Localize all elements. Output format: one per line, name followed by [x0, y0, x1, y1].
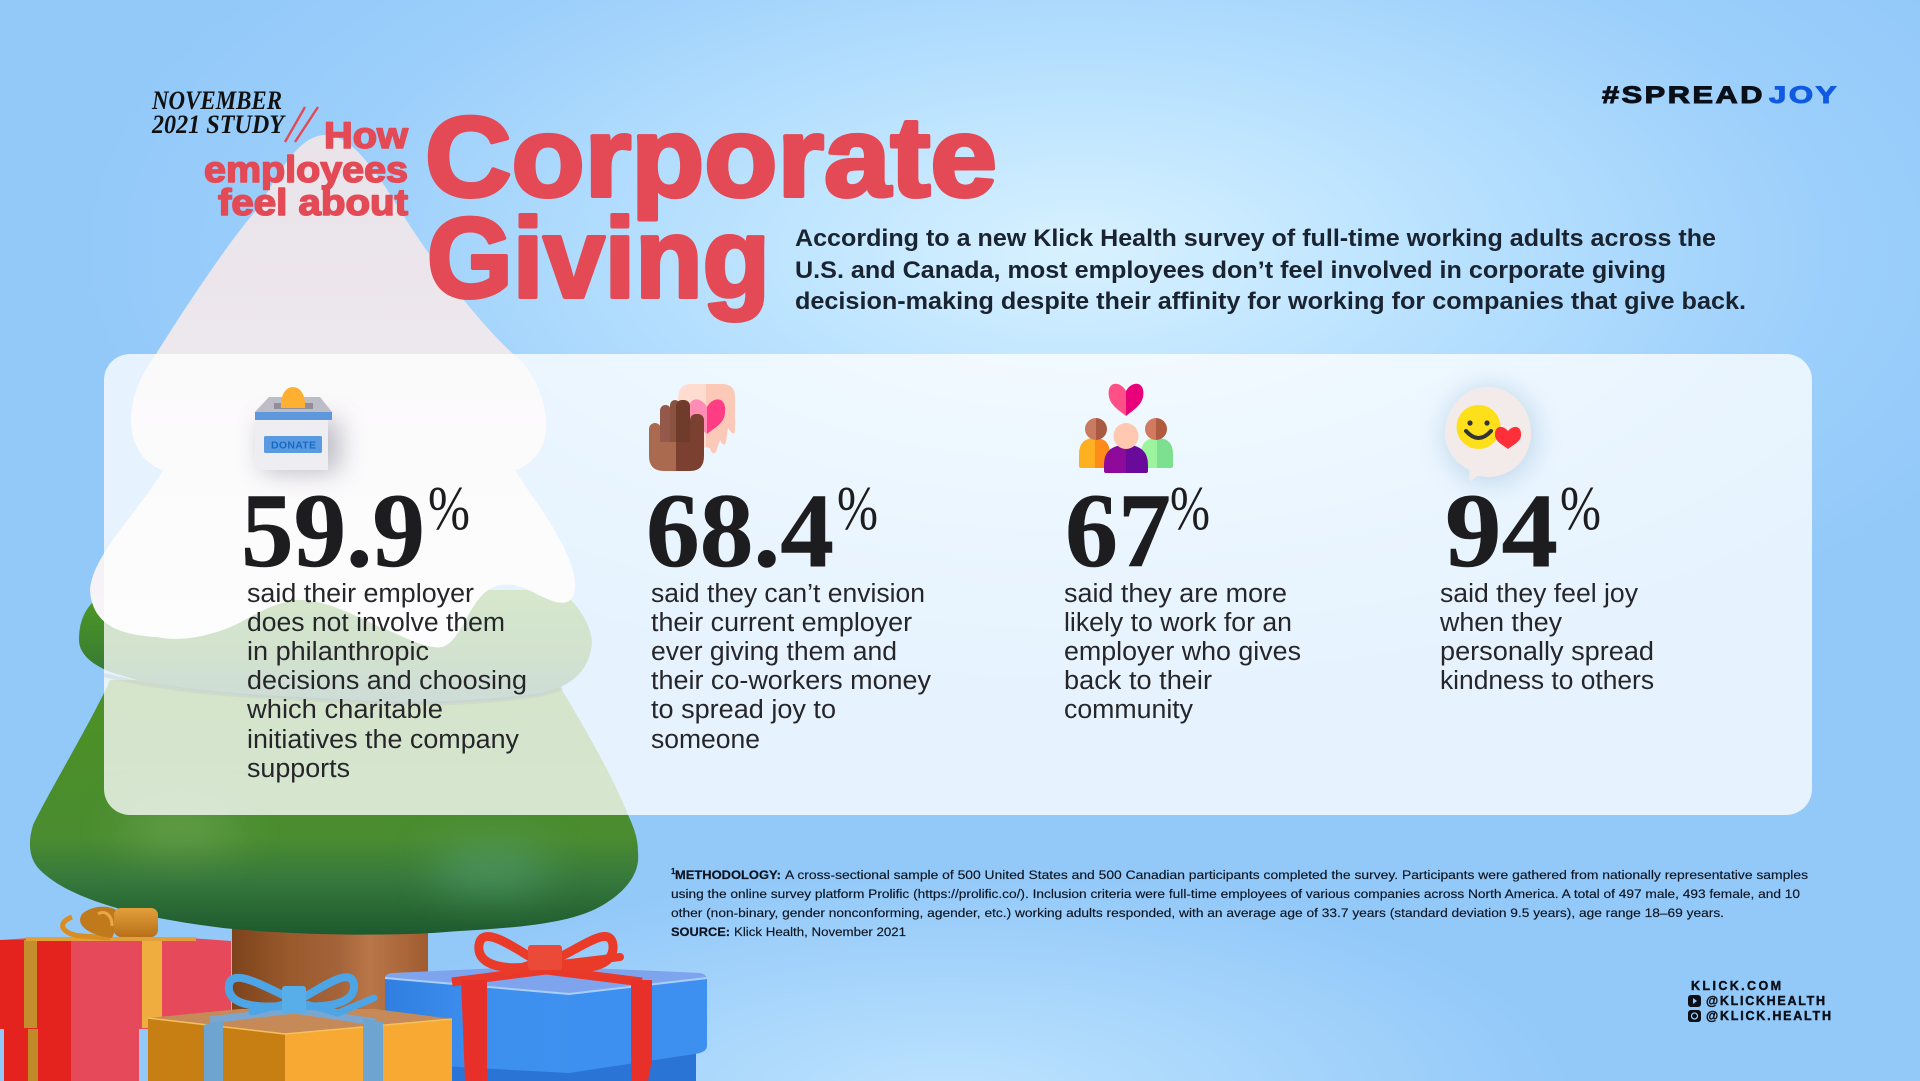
description: in philanthropic	[247, 638, 429, 666]
red gift	[0, 907, 231, 1081]
slashes	[285, 107, 318, 142]
description: which charitable	[246, 696, 443, 724]
description: said they can’t envision	[651, 580, 925, 608]
description	[1064, 580, 1301, 724]
figure: 68.4%: 68.4	[646, 472, 834, 589]
methodology note: Klick Health, November 2021	[734, 925, 906, 939]
methodology note: A cross-sectional sample of 500 United States and 500 Canadian participants completed the survey. Participants were gathered from nationally representative samples	[785, 868, 1808, 882]
description: said they feel joy	[1440, 580, 1638, 608]
description: supports	[247, 755, 350, 783]
stat 1	[241, 387, 527, 783]
description: ever giving them and	[651, 638, 897, 666]
stat 2	[646, 384, 931, 754]
stat 4	[1439, 387, 1654, 695]
tree trunk	[232, 920, 428, 1081]
tree bottom tier	[30, 680, 638, 935]
figure: 94%	[1445, 472, 1601, 589]
stat 3	[1064, 384, 1301, 724]
footer: social links	[1688, 979, 1831, 1023]
description: said they are more	[1064, 580, 1287, 608]
description: community	[1064, 696, 1193, 724]
description	[651, 580, 931, 754]
description: decisions and choosing	[247, 667, 527, 695]
intro paragraph: U.S. and Canada, most employees don’t feel involved in corporate giving	[795, 257, 1666, 284]
description: said their employer	[247, 580, 475, 608]
figure: 67%: 67	[1065, 472, 1171, 589]
intro paragraph	[795, 225, 1746, 315]
illustration: gift boxes	[0, 907, 707, 1081]
description: likely to work for an	[1064, 609, 1292, 637]
description: when they	[1439, 609, 1562, 637]
methodology note: other (non-binary, gender nonconforming, agender, etc.) working adults responded, with an average age of 33.7 years (standard deviation 9.5 years), age range 18–69 years.	[671, 906, 1724, 920]
icon: donation box	[255, 387, 340, 472]
icon: donation box: DONATE	[271, 440, 316, 452]
header: study label	[151, 86, 286, 139]
title	[425, 94, 997, 321]
hashtag: #SPREAD	[1602, 82, 1765, 109]
red ribbons	[452, 970, 652, 1081]
subtitle: How	[324, 115, 408, 156]
title: Corporate	[425, 94, 997, 220]
hashtag: JOY	[1769, 82, 1839, 109]
methodology note: SOURCE:	[671, 925, 730, 939]
icon: raised hands and heart	[649, 384, 735, 471]
panel: statistics	[104, 354, 1812, 815]
tree middle tier	[79, 590, 592, 704]
icon: youtube	[1688, 995, 1701, 1007]
tier shadow line	[104, 675, 562, 704]
tree highlights	[120, 806, 551, 890]
footer: social links: @KLICKHEALTH	[1706, 994, 1825, 1008]
methodology note	[671, 867, 1808, 939]
methodology note: 1	[671, 867, 676, 876]
orange gift	[148, 977, 452, 1081]
blue bow	[229, 977, 374, 1014]
subtitle	[204, 115, 408, 223]
figure: 67%: %	[1170, 475, 1210, 543]
subtitle: feel about	[218, 182, 408, 223]
footer: social links: KLICK.COM	[1691, 979, 1781, 993]
description	[246, 580, 527, 783]
description	[1439, 580, 1654, 695]
description: personally spread	[1440, 638, 1654, 666]
description: to spread joy to	[651, 696, 836, 724]
gold bow	[63, 907, 158, 938]
figure: 94%: %	[1560, 475, 1601, 543]
subtitle: employees	[204, 149, 408, 190]
footer: social links: @KLICK.HEALTH	[1706, 1009, 1831, 1023]
red bow	[479, 937, 620, 972]
intro paragraph: According to a new Klick Health survey of full-time working adults across the	[795, 225, 1716, 252]
description: kindness to others	[1440, 667, 1654, 695]
description: their co-workers money	[651, 667, 931, 695]
icon: people and heart	[1079, 384, 1173, 473]
title: Giving	[427, 195, 770, 321]
header: study label: NOVEMBER	[151, 86, 282, 115]
blue gift	[385, 937, 707, 1081]
description: employer who gives	[1064, 638, 1301, 666]
methodology note: using the online survey platform Prolific (https://prolific.co/). Inclusion criteria were full-time employees of various companies across North America. A total of 497 male, 493 female, and 10	[671, 887, 1800, 901]
hashtag	[1602, 82, 1839, 109]
description: back to their	[1064, 667, 1213, 695]
description: does not involve them	[247, 609, 505, 637]
intro paragraph: decision-making despite their affinity for working for companies that give back.	[795, 288, 1746, 315]
figure: 94%: 94	[1445, 472, 1558, 589]
description: initiatives the company	[247, 726, 519, 754]
blue ribbons	[204, 1010, 383, 1081]
figure: 59.9%: %	[428, 475, 470, 543]
header: study label: 2021 STUDY	[151, 110, 286, 139]
tree snow cap	[90, 135, 575, 647]
description: their current employer	[651, 609, 913, 637]
icon: instagram	[1688, 1010, 1701, 1022]
figure: 59.9%: 59.9	[241, 472, 425, 589]
icon: smiley speech bubble	[1444, 387, 1536, 483]
figure: 68.4%: %	[837, 475, 878, 543]
description: someone	[651, 726, 760, 754]
illustration: christmas tree	[30, 135, 638, 1081]
methodology note: METHODOLOGY:	[675, 868, 781, 882]
